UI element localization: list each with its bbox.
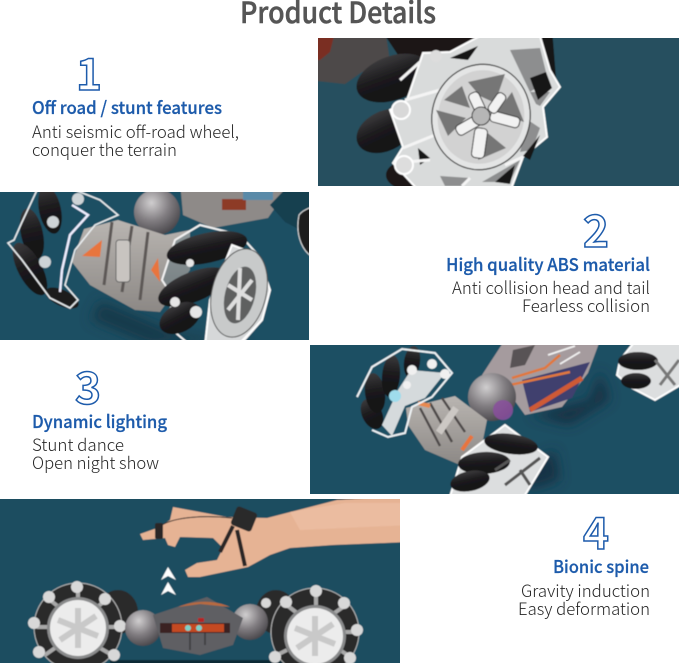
right wheel — [256, 585, 363, 665]
feature 2 description: Anti collision head and tail — [452, 274, 650, 299]
feature 1 description — [32, 118, 239, 161]
number 3: 3 — [75, 353, 101, 417]
feature 3 text block — [32, 353, 167, 474]
number 4: 4 — [583, 498, 609, 562]
feature 4 text block — [518, 498, 650, 620]
panel 3: car with lighting photo — [310, 345, 679, 494]
panel 4: hand gesture controlling car photo — [0, 489, 410, 665]
feature 3 description — [32, 431, 159, 474]
feature 1 text block — [32, 39, 239, 161]
feature 3 description: Open night show — [32, 449, 159, 474]
feature 2 text block — [446, 196, 650, 317]
feature 4 heading: Bionic spine — [553, 554, 649, 579]
car body — [125, 597, 268, 655]
panel 2: car body and wheels photo — [0, 192, 309, 340]
feature 2 description: Fearless collision — [522, 292, 650, 317]
icon: up chevrons — [161, 567, 176, 595]
feature 1 heading: Off road / stunt features — [32, 95, 222, 120]
feature 2 heading: High quality ABS material — [446, 252, 650, 277]
number 1: 1 — [76, 39, 102, 103]
feature 3 description: Stunt dance — [32, 431, 124, 456]
icon: hand and arm — [140, 496, 410, 577]
feature 1 description: conquer the terrain — [32, 136, 177, 161]
feature 1 description: Anti seismic off-road wheel, — [32, 118, 239, 143]
feature 2 description — [452, 274, 650, 317]
number 2: 2 — [583, 196, 609, 260]
feature 4 description: Easy deformation — [518, 595, 650, 620]
feature 4 description: Gravity induction — [521, 577, 650, 602]
feature 4 description — [518, 577, 650, 620]
panel 1: wheel close-up photo — [318, 38, 679, 186]
feature 3 heading: Dynamic lighting — [32, 409, 167, 434]
left wheel — [28, 581, 138, 665]
